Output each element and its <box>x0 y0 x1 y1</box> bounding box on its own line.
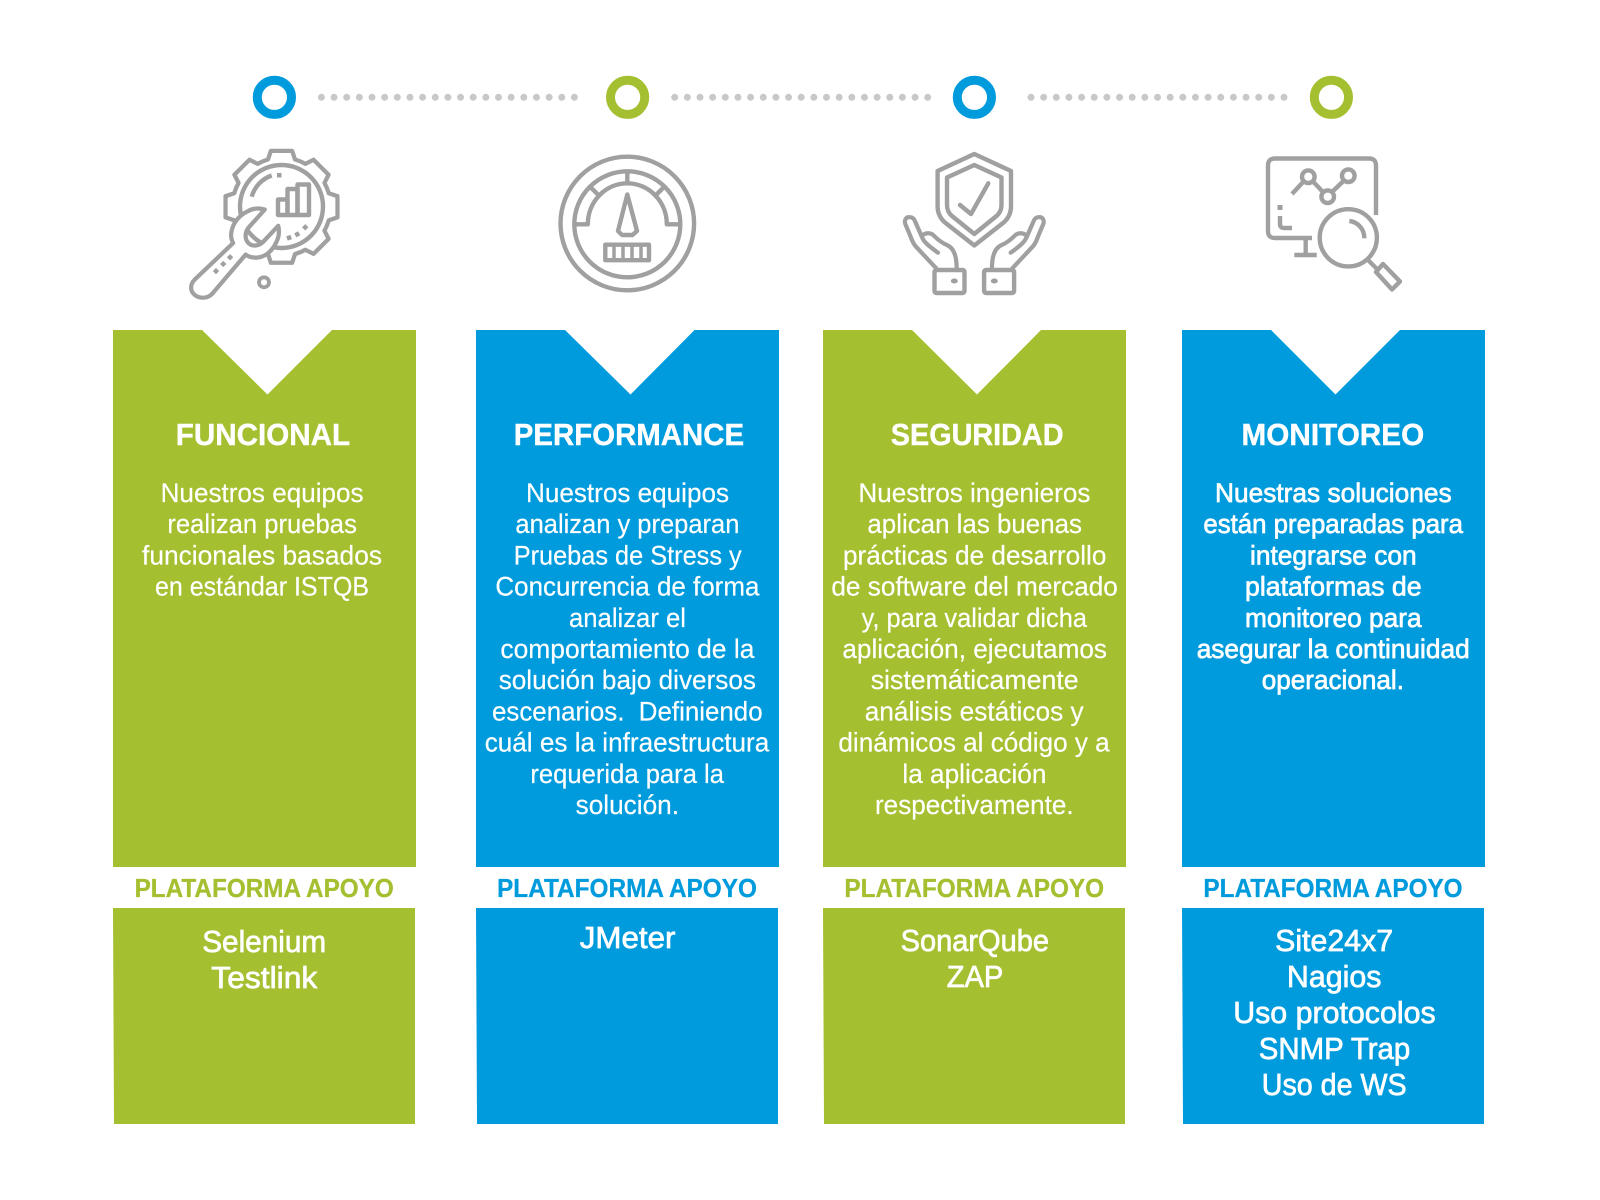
description: monitoreo para <box>1245 603 1423 633</box>
platform box: funcional: Testlink <box>211 961 318 995</box>
description: Nuestros equipos <box>526 478 729 508</box>
panel: funcional <box>113 330 416 867</box>
description: Nuestros ingenieros <box>858 478 1090 508</box>
icon: gear and wrench <box>191 151 337 298</box>
description: Nuestros equipos <box>161 478 364 508</box>
description: aplican las buenas <box>867 509 1082 539</box>
panel: performance <box>476 330 779 867</box>
label: plataforma apoyo 1: PLATAFORMA APOYO <box>135 873 394 903</box>
description: Nuestras soluciones <box>1215 478 1452 508</box>
platform box: funcional: Selenium <box>202 925 326 959</box>
description: en estándar ISTQB <box>155 572 369 602</box>
icon: monitor and magnifier <box>1268 158 1400 290</box>
description: funcionales basados <box>142 540 382 570</box>
description: analizan y preparan <box>515 509 739 539</box>
description <box>1197 478 1470 695</box>
timeline <box>257 80 1348 114</box>
description: Concurrencia de forma <box>495 572 760 602</box>
heading: FUNCIONAL <box>176 417 350 452</box>
platform box: funcional <box>113 908 415 1124</box>
description: cuál es la infraestructura <box>485 728 770 758</box>
panel background <box>113 330 416 867</box>
step marker 3 <box>957 80 992 114</box>
description: plataformas de <box>1245 572 1422 602</box>
panel background <box>476 330 779 867</box>
description: prácticas de desarrollo <box>843 540 1106 570</box>
description: están preparadas para <box>1203 509 1464 539</box>
description: integrarse con <box>1250 540 1417 570</box>
description: escenarios. Definiendo <box>492 696 763 726</box>
description: realizan pruebas <box>167 509 357 539</box>
description: operacional. <box>1262 665 1404 695</box>
description: de software del mercado <box>831 572 1118 602</box>
description: dinámicos al código y a <box>838 728 1111 758</box>
platform box: seguridad <box>823 908 1125 1124</box>
description: solución. <box>576 790 679 820</box>
dotted connector 3 <box>1031 94 1285 101</box>
label: plataforma apoyo 3: PLATAFORMA APOYO <box>844 873 1104 903</box>
icon: shield and hands <box>905 154 1044 293</box>
description: solución bajo diversos <box>499 665 756 695</box>
description: asegurar la continuidad <box>1197 634 1470 664</box>
description <box>142 478 382 602</box>
description: requerida para la <box>530 759 725 789</box>
label: plataforma apoyo 4: PLATAFORMA APOYO <box>1203 873 1463 903</box>
description: Pruebas de Stress y <box>514 540 742 570</box>
platform box: monitoreo: SNMP Trap <box>1259 1032 1410 1066</box>
description: sistemáticamente <box>871 665 1079 695</box>
description: la aplicación <box>902 759 1046 789</box>
icon: speedometer <box>560 157 694 290</box>
heading: PERFORMANCE <box>514 417 744 452</box>
platform box: monitoreo <box>1182 908 1484 1124</box>
heading: SEGURIDAD <box>891 417 1064 452</box>
description: analizar el <box>569 603 686 633</box>
step marker 1 <box>257 80 292 114</box>
panel: seguridad <box>823 330 1126 867</box>
step marker 4 <box>1314 80 1348 114</box>
platform box: performance: JMeter <box>580 921 675 955</box>
heading: MONITOREO <box>1242 417 1424 452</box>
platform box: seguridad: ZAP <box>947 960 1003 994</box>
description: y, para validar dicha <box>862 603 1088 633</box>
platform box: monitoreo: Site24x7 <box>1275 924 1393 958</box>
description: comportamiento de la <box>500 634 755 664</box>
platform box: performance <box>476 908 778 1124</box>
description: análisis estáticos y <box>865 696 1084 726</box>
dotted connector 2 <box>675 94 928 101</box>
panel: monitoreo <box>1182 330 1485 867</box>
description <box>485 478 770 820</box>
description: aplicación, ejecutamos <box>842 634 1107 664</box>
platform box: monitoreo: Nagios <box>1287 960 1382 994</box>
panel background <box>823 330 1126 867</box>
platform box: monitoreo: Uso protocolos <box>1233 996 1436 1030</box>
description <box>831 478 1118 820</box>
description: respectivamente. <box>875 790 1074 820</box>
dotted connector 1 <box>321 94 575 101</box>
step marker 2 <box>610 80 645 114</box>
platform box: monitoreo: Uso de WS <box>1262 1068 1407 1102</box>
platform box: seguridad: SonarQube <box>901 924 1049 958</box>
panel background <box>1182 330 1485 867</box>
label: plataforma apoyo 2: PLATAFORMA APOYO <box>497 873 757 903</box>
